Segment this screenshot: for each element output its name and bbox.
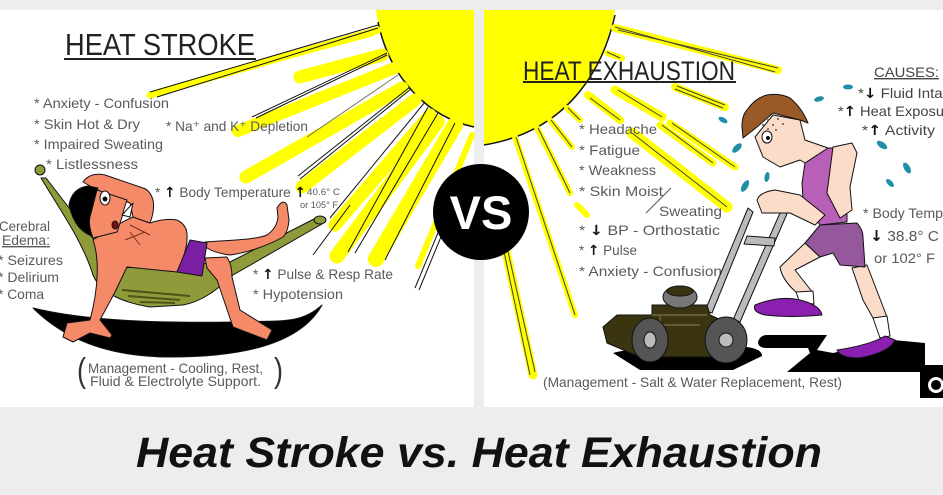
callout: cerebral edema: Edema:	[2, 232, 50, 248]
symptom list: heat exhaustion: * Headache	[579, 121, 657, 137]
symptom list: heat exhaustion: * Anxiety - Confusion	[579, 263, 722, 279]
text: management heat stroke	[77, 352, 283, 390]
symptom list: heat stroke: or 105° F	[300, 200, 338, 211]
badge: VS: VS	[450, 186, 512, 239]
symptom list: heat stroke: * ↑ Pulse & Resp Rate	[253, 266, 393, 283]
symptom list: heat exhaustion: * Skin Moist	[579, 183, 663, 199]
symptom list: heat stroke: 40.6° C	[307, 187, 340, 198]
symptom list: heat stroke	[34, 95, 393, 302]
symptom list: heat exhaustion: Sweating	[659, 203, 722, 219]
icon: sweat drops	[717, 84, 913, 193]
symptom list: heat exhaustion: * Weakness	[579, 162, 656, 178]
symptom list: heat stroke: * Skin Hot & Dry	[34, 116, 140, 132]
symptom list: heat exhaustion: * ↓ BP - Orthostatic	[579, 222, 720, 239]
causes list: *↓ Fluid Intal	[858, 85, 943, 102]
symptom list: heat stroke: * Listlessness	[46, 156, 138, 172]
causes list: *↑ Activity	[862, 122, 935, 139]
text: management heat exhaustion: (Management - Salt & Water Replacement, Rest)	[543, 374, 842, 390]
body temperature note	[863, 205, 943, 266]
callout: cerebral edema	[0, 218, 63, 302]
causes list: *↑ Heat Exposu	[838, 103, 943, 120]
panel: heat exhaustion	[484, 10, 943, 407]
symptom list: heat stroke: * Na⁺ and K⁺ Depletion	[166, 118, 308, 134]
text: management heat stroke: )	[274, 352, 283, 390]
title: Heat Stroke vs. Heat Exhaustion	[136, 429, 822, 477]
symptom list: heat stroke: * ↑ Body Temperature ↑	[155, 184, 306, 201]
illustration: man in hammock	[33, 165, 326, 357]
text: management heat stroke: (	[77, 352, 87, 390]
body temperature note: or 102° F	[874, 250, 935, 266]
symptom list: heat stroke: * Impaired Sweating	[34, 136, 163, 152]
heading: heat exhaustion: HEAT EXHAUSTION	[523, 56, 735, 86]
causes list	[838, 64, 943, 139]
symptom list: heat exhaustion	[579, 121, 722, 279]
icon: right sun with rays	[484, 10, 778, 375]
body temperature note: * Body Temp	[863, 205, 943, 221]
causes list: CAUSES:	[874, 64, 939, 80]
text: management heat stroke: Management - Cooling, Rest,	[88, 360, 263, 376]
symptom list: heat stroke: * Hypotension	[253, 286, 343, 302]
text: management heat stroke: Fluid & Electrolyte Support.	[90, 373, 261, 389]
symptom list: heat exhaustion: * Fatigue	[579, 142, 640, 158]
panel: heat stroke	[0, 10, 474, 407]
badge: VS	[433, 164, 529, 260]
body temperature note: ↓ 38.8° C	[870, 227, 939, 245]
callout: cerebral edema: Cerebral	[0, 218, 50, 234]
heading: heat stroke: HEAT STROKE	[65, 27, 255, 62]
symptom list: heat stroke: * Anxiety - Confusion	[34, 95, 169, 111]
symptom list: heat exhaustion: * ↑ Pulse	[579, 242, 637, 259]
icon: left sun with rays	[150, 10, 474, 290]
logo mark	[920, 365, 943, 398]
illustration: man pushing lawn mower	[603, 94, 943, 372]
